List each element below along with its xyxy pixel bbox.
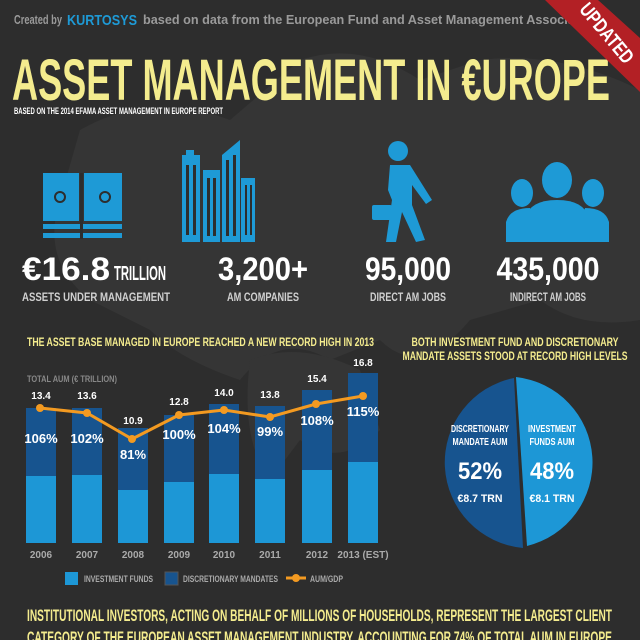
bar chart: 108% (300, 413, 334, 428)
legend: INVESTMENT FUNDS (84, 574, 153, 584)
bar chart: 10.9 (123, 416, 143, 427)
bar chart: 2010 (213, 550, 236, 561)
pie chart: 48% (530, 458, 574, 485)
bar chart: 2011 (259, 550, 281, 561)
header credit line: based on data from the European Fund and Asset Management Association (143, 12, 598, 27)
stat: direct am jobs: 95,000 (365, 251, 451, 287)
stat: direct am jobs (365, 141, 451, 304)
bar chart: 104% (207, 421, 241, 436)
bar chart: 13.8 (260, 390, 280, 401)
icon: buildings (182, 140, 255, 242)
pie chart: DISCRETIONARY (451, 424, 509, 435)
stat: assets under management (22, 173, 171, 304)
stat: am companies: 3,200+ (218, 251, 308, 287)
stat: assets under management: TRILLION (114, 263, 166, 285)
bar chart: 102% (70, 431, 104, 446)
header credit line: Created by (14, 12, 63, 27)
pie heading (402, 335, 628, 363)
pie chart: 52% (458, 458, 502, 485)
bar chart: 14.0 (214, 388, 234, 399)
header credit line: KURTOSYS (67, 12, 137, 29)
bar chart: 13.4 (31, 391, 51, 402)
pie chart: €8.7 TRN (458, 493, 503, 505)
stat: assets under management: €16.8 (22, 251, 110, 287)
bar chart: TOTAL AUM (€ TRILLION) (27, 374, 117, 384)
bar chart: 12.8 (169, 397, 189, 408)
bar chart: 16.8 (353, 358, 373, 369)
chart heading: THE ASSET BASE MANAGED IN EUROPE REACHED A NEW RECORD HIGH IN 2013 (27, 335, 374, 349)
stat: indirect am jobs (496, 162, 609, 304)
bar chart: 2007 (76, 550, 99, 561)
legend: AUM/GDP (310, 574, 343, 584)
legend (65, 572, 343, 585)
stat: direct am jobs: DIRECT AM JOBS (370, 290, 446, 304)
stat: indirect am jobs: INDIRECT AM JOBS (510, 290, 586, 304)
pie chart: FUNDS AUM (530, 437, 574, 448)
bar chart: 115% (347, 404, 380, 419)
bar chart: 100% (162, 427, 196, 442)
bar chart: 2006 (30, 550, 53, 561)
stat: am companies (182, 140, 308, 304)
bar chart: 13.6 (77, 391, 97, 402)
stat: am companies: AM COMPANIES (227, 290, 299, 304)
pie chart (445, 377, 593, 548)
icon: walking man (372, 141, 432, 242)
line: aum/gdp (40, 396, 363, 439)
icon: money (43, 173, 122, 239)
icon: people (506, 162, 609, 242)
bar chart: 2008 (122, 550, 145, 561)
pie chart: €8.1 TRN (530, 493, 575, 505)
bar chart (24, 358, 389, 561)
bar chart: 15.4 (307, 374, 327, 385)
header credit line (14, 12, 598, 29)
ribbon: updated (545, 0, 640, 92)
stat: indirect am jobs: 435,000 (496, 251, 600, 287)
stat: assets under management: ASSETS UNDER MANAGEMENT (22, 290, 171, 304)
bar chart: 99% (257, 424, 283, 439)
bar chart: 2009 (168, 550, 191, 561)
pie chart: MANDATE AUM (452, 437, 508, 448)
bottom statement (27, 606, 612, 640)
background map (54, 53, 640, 480)
bar chart: 81% (120, 447, 146, 462)
legend: DISCRETIONARY MANDATES (183, 574, 278, 584)
bar chart: 2012 (306, 550, 329, 561)
bar chart: 2013 (EST) (337, 550, 389, 561)
pie chart: INVESTMENT (528, 424, 576, 435)
subtitle: BASED ON THE 2014 EFAMA ASSET MANAGEMENT IN EUROPE REPORT (14, 106, 223, 116)
bar chart: 106% (24, 431, 58, 446)
